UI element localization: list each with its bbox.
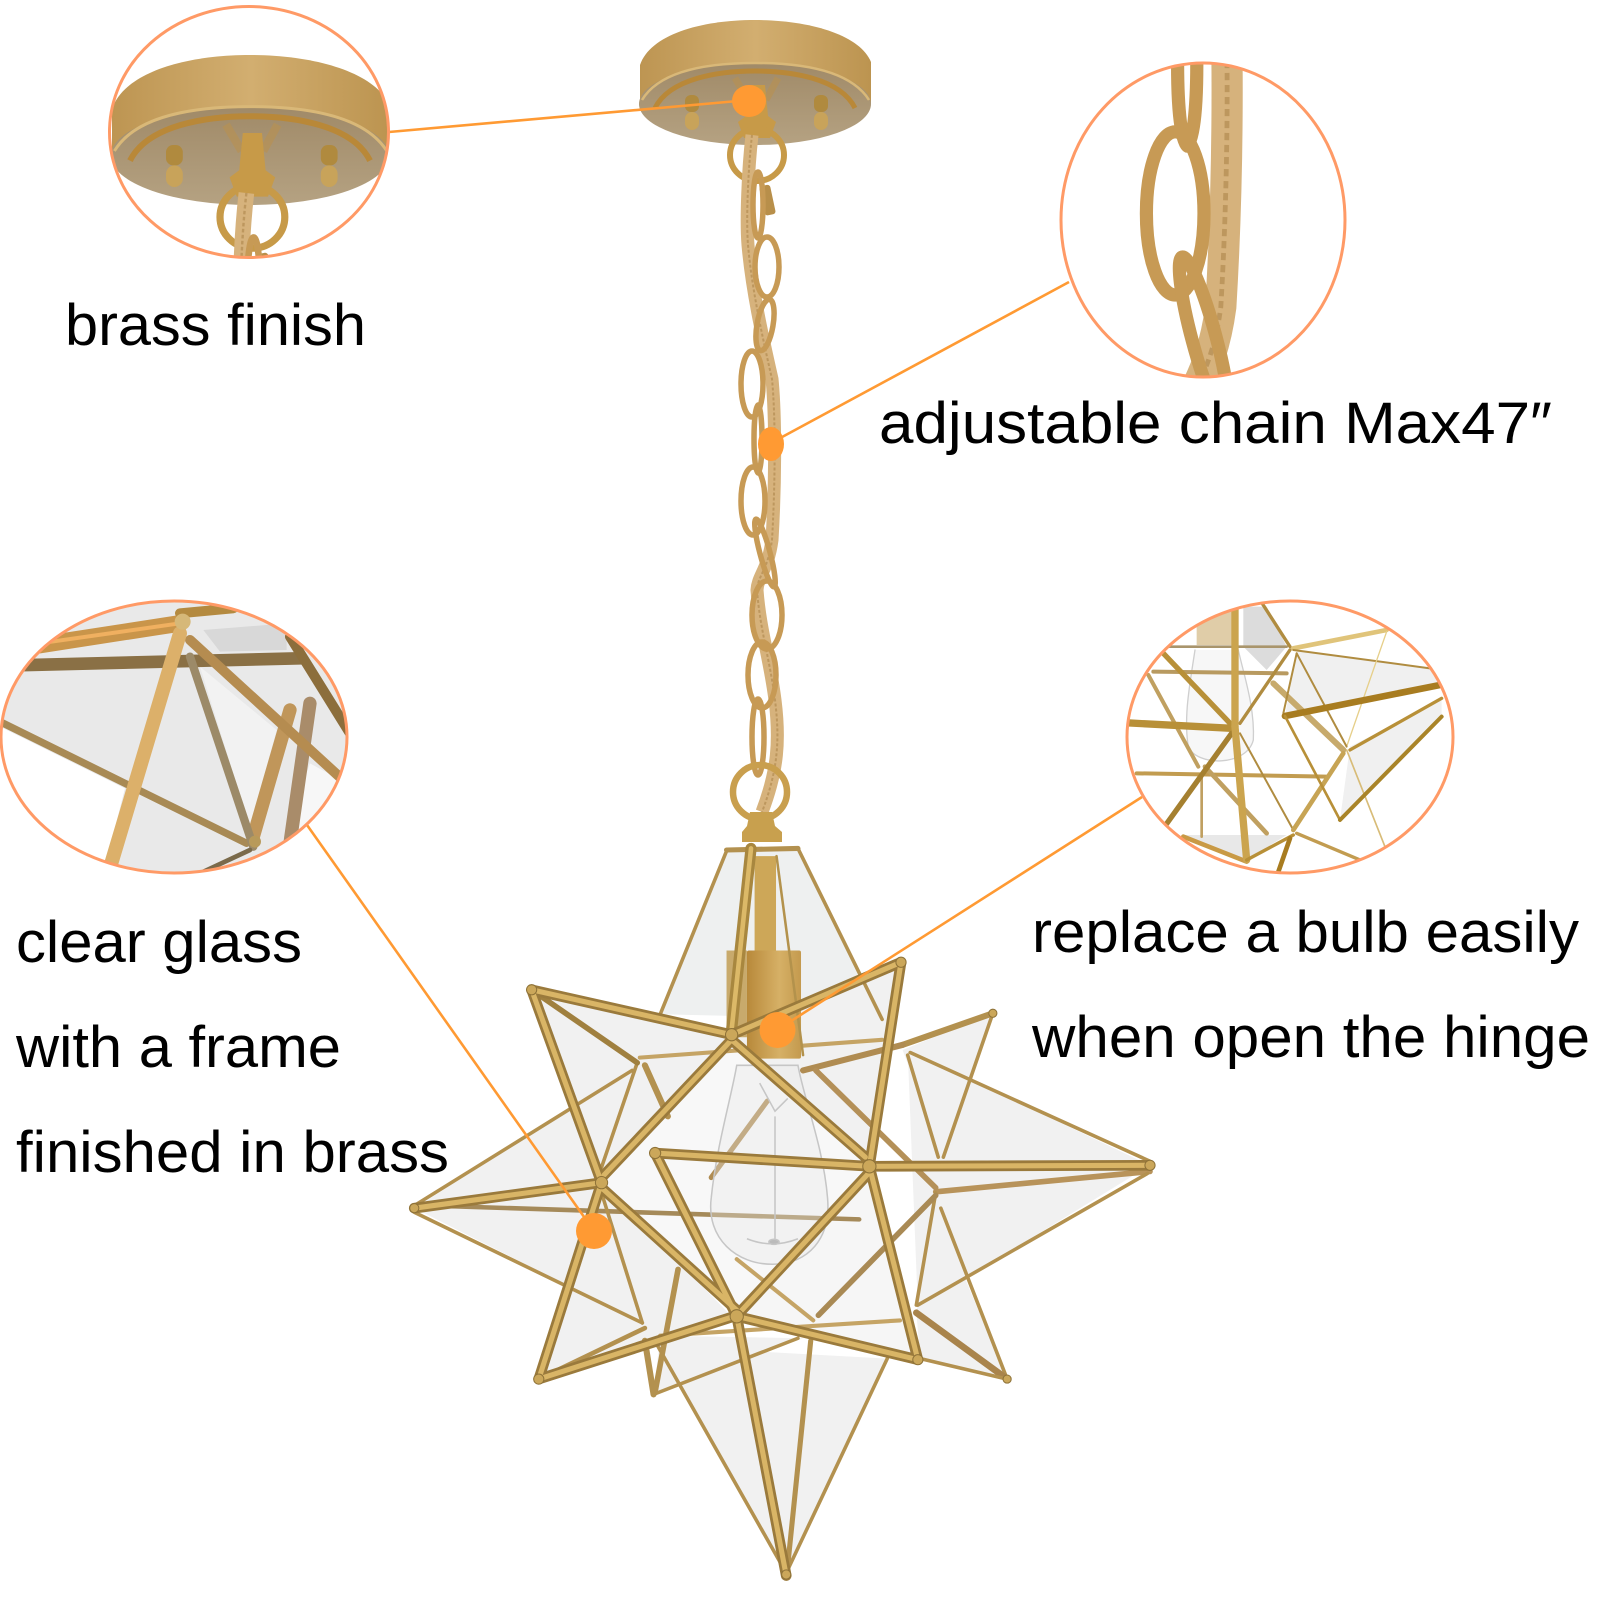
marker dot: canopy <box>732 85 766 117</box>
label: replace a bulb <box>1031 900 1590 1070</box>
back frame <box>414 848 1150 1573</box>
light bulb <box>711 1065 828 1264</box>
label: clear glass: finished in brass <box>16 1120 449 1185</box>
leader line: canopy <box>389 100 749 132</box>
panel: chain and cord <box>733 135 787 842</box>
marker dot: bulb <box>760 1012 796 1048</box>
label: clear glass: with a frame <box>15 1015 341 1080</box>
leader line: bulb <box>777 797 1142 1030</box>
label: clear glass: clear glass <box>16 910 302 975</box>
detail circle: clear glass <box>0 600 353 873</box>
leader line: glass <box>307 825 594 1231</box>
label: replace a bulb: replace a bulb easily <box>1032 900 1579 965</box>
detail circle: chain <box>1060 62 1346 378</box>
detail circle: bulb hinge <box>1123 600 1453 877</box>
detail circle: brass canopy <box>108 5 390 259</box>
frame joints <box>410 957 1155 1579</box>
panel: ceiling canopy <box>639 20 871 181</box>
glass panes <box>414 848 1150 1576</box>
panel: moravian star lantern <box>410 848 1155 1579</box>
leader line: chain <box>771 282 1069 443</box>
marker dot: glass <box>576 1213 612 1249</box>
label: replace a bulb: when open the hinge <box>1031 1005 1590 1070</box>
front frame dark edge <box>414 962 1150 1576</box>
lamp socket and rod <box>727 856 801 1059</box>
top spike frame <box>732 848 803 1055</box>
label: brass finish: brass finish <box>65 293 366 358</box>
label: clear glass <box>15 910 449 1185</box>
label: adjustable chain: adjustable chain Max47″ <box>879 391 1552 456</box>
front frame highlight <box>414 962 1150 1576</box>
marker dot: chain <box>758 427 784 461</box>
